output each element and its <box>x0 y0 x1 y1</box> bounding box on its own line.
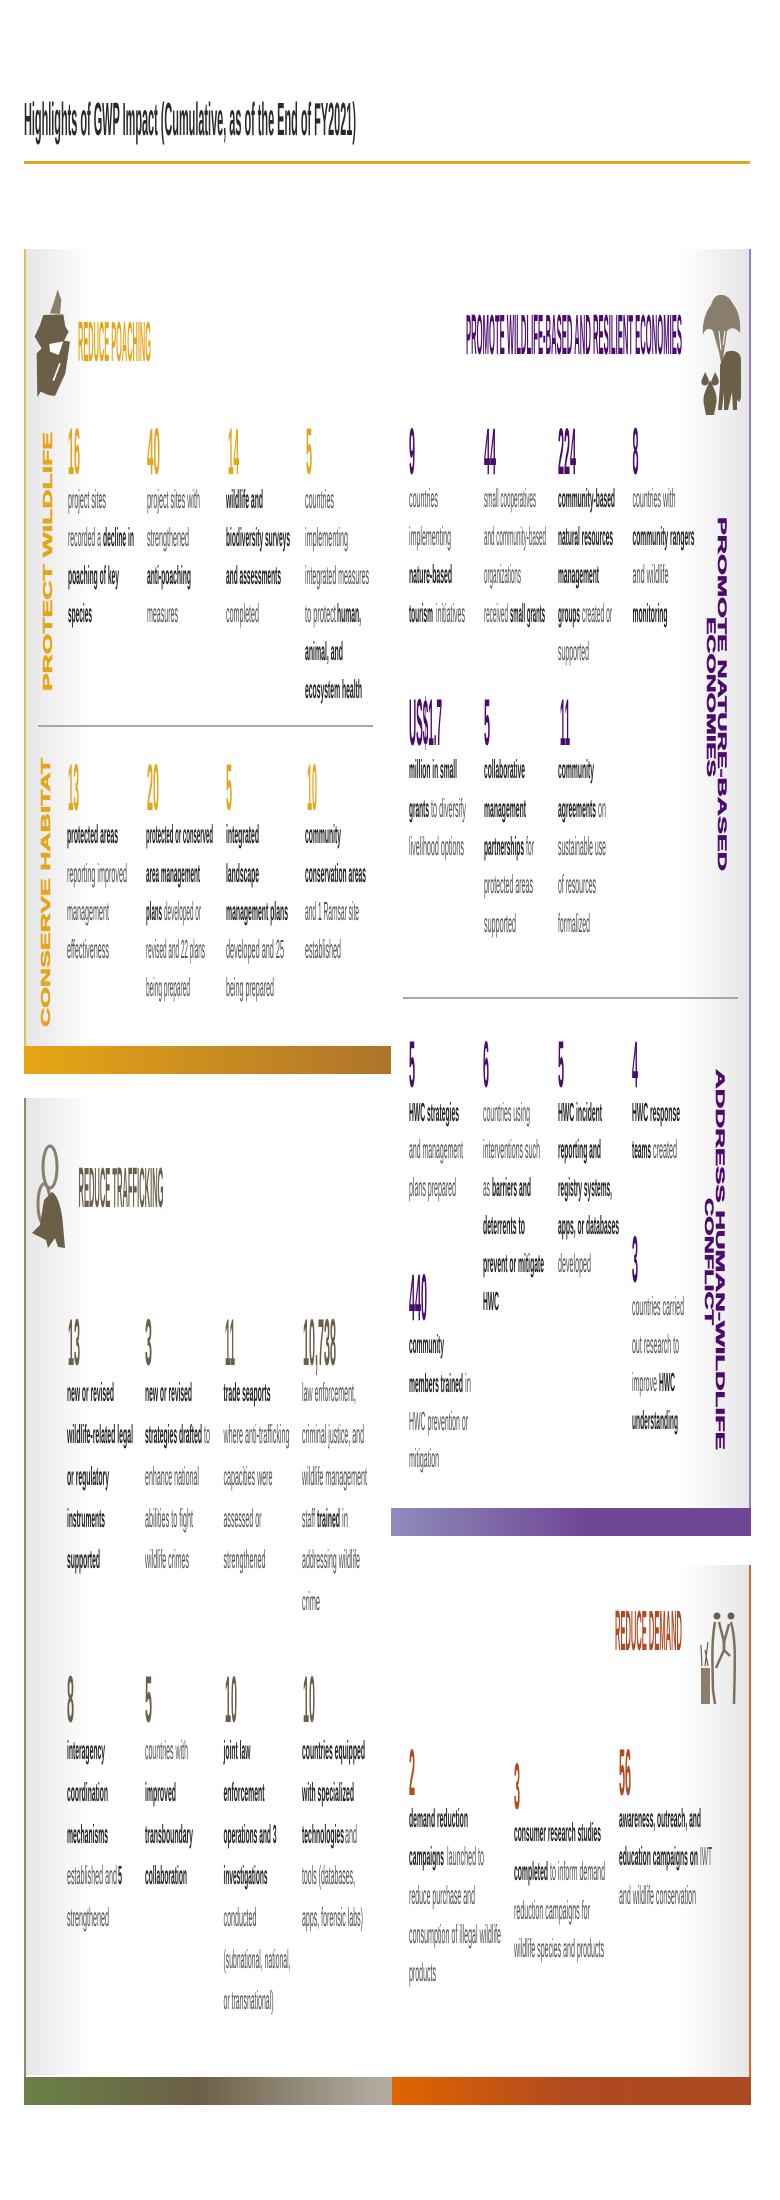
panel: promote wildlife-based economies: HWC incident <box>558 1097 602 1127</box>
stat: 5 landscape plans <box>226 750 288 1002</box>
panel: promote wildlife-based economies <box>403 249 751 1536</box>
stat: 6 countries barriers: 6 <box>483 1027 489 1101</box>
text: and 1 Ramsar site <box>305 896 359 926</box>
panel: promote wildlife-based economies: natural resources <box>558 521 613 551</box>
panel: reduce demand: to inform demand <box>550 1856 605 1886</box>
stat: 9 countries nature-based tourism <box>409 414 465 628</box>
panel: reduce demand: IWT <box>700 1841 712 1871</box>
stat: 10,738 staff trained: staff <box>302 1503 315 1533</box>
stat: 44 small grants <box>484 414 546 628</box>
panel: promote wildlife-based economies: livelihood options <box>409 831 464 861</box>
panel: reduce poaching: protected areas <box>67 819 118 849</box>
panel: reduce poaching: integrated <box>226 819 259 849</box>
stat: 440 community members <box>409 1260 471 1473</box>
text: criminal justice, and <box>302 1419 364 1449</box>
stat: 3 countries research <box>632 1222 684 1435</box>
stat: 44 small grants: 44 <box>484 414 496 488</box>
panel: promote wildlife-based economies: and community-based <box>484 521 546 551</box>
label: promote nature-based economies: ECONOMIES <box>704 617 718 777</box>
stat: 440 community members: mitigation <box>409 1443 439 1473</box>
bar: economies footer <box>391 1508 751 1536</box>
stat: US$1.7 million <box>409 685 466 861</box>
stat: 4 response teams: teams <box>632 1134 651 1164</box>
panel: reduce trafficking <box>24 1098 392 2105</box>
stat: 16 project sites: 16 <box>68 414 80 488</box>
panel: promote wildlife-based economies: community <box>409 1329 444 1359</box>
panel: promote wildlife-based economies: to diversify <box>431 793 466 823</box>
stat: 3 consumer research studies: completed <box>514 1856 548 1886</box>
stat: 44 small grants: received <box>484 598 508 628</box>
panel: reduce poaching: implementing <box>305 522 348 552</box>
panel: reduce trafficking: enhance national <box>145 1461 199 1491</box>
panel: reduce trafficking: instruments <box>67 1503 105 1533</box>
panel: promote wildlife-based economies: interventions such <box>483 1134 540 1164</box>
panel: promote wildlife-based economies: nature-based <box>409 559 452 589</box>
text: integrated measures <box>305 560 369 590</box>
stat: 2 demand reduction campaigns <box>409 1735 501 1987</box>
stat: 224 resource groups: 224 <box>558 414 576 488</box>
stat: 10 joint operations: conducted <box>224 1902 256 1932</box>
panel: promote wildlife-based economies: deterrents to <box>483 1210 525 1240</box>
panel: reduce poaching: measures <box>147 598 178 628</box>
panel: reduce trafficking: interagency <box>67 1735 105 1765</box>
label: protect wildlife: PROTECT WILDLIFE <box>40 431 55 691</box>
text: REDUCE TRAFFICKING <box>78 1156 164 1220</box>
stat: 8 coordination mechanisms: 8 <box>67 1662 74 1736</box>
panel: promote wildlife-based economies: barriers and <box>492 1172 531 1202</box>
stat: 5 countries integrated measures: countries <box>305 484 334 514</box>
icon: people and wildlife product <box>701 1612 735 1704</box>
panel: reduce poaching: developed and 25 <box>226 934 284 964</box>
stat: 20 management plans <box>146 750 213 1002</box>
label: address human-wildlife conflict <box>702 1069 727 1450</box>
panel: reduce trafficking: where anti-trafficking <box>223 1419 290 1449</box>
panel: reduce trafficking: improved <box>145 1777 176 1807</box>
panel: promote wildlife-based economies: partnerships <box>484 831 524 861</box>
panel: promote wildlife-based economies: registry systems, <box>558 1172 612 1202</box>
stat: 5 countries integrated measures <box>305 414 369 704</box>
stat: 10,738 staff trained: crime <box>302 1586 320 1616</box>
text: 10,738 <box>303 1305 336 1379</box>
panel: reduce trafficking: strategies drafted <box>145 1419 202 1449</box>
stat: 16 project sites: species <box>68 598 92 628</box>
stat: 5 HWC incident reporting: developed <box>558 1248 591 1278</box>
panel: reduce trafficking: (subnational, national, <box>224 1944 290 1974</box>
panel: reduce poaching: area management <box>146 858 200 888</box>
stat: 5 transboundary: 5 <box>145 1662 152 1736</box>
panel: reduce trafficking: technologies <box>302 1819 344 1849</box>
stat: 14 surveys <box>226 414 290 628</box>
panel: reduce poaching: human, <box>337 598 361 628</box>
panel: reduce trafficking: wildlife crimes <box>145 1544 189 1574</box>
stat: 5 HWC strategies <box>409 1027 463 1202</box>
panel: reduce trafficking: strengthened <box>224 1544 266 1574</box>
panel: promote wildlife-based economies: monitoring <box>632 598 668 628</box>
panel: promote wildlife-based economies: HWC strategies <box>409 1097 459 1127</box>
label: promote nature-based economies: PROMOTE NATURE-BASED <box>715 517 729 872</box>
panel: reduce trafficking: capacities were <box>224 1461 272 1491</box>
panel: reduce poaching: animal, and <box>305 636 343 666</box>
panel: promote wildlife-based economies: organizations <box>484 559 521 589</box>
stat: 8 community rangers <box>632 414 694 628</box>
panel: reduce poaching: management plans <box>226 896 288 926</box>
panel: reduce poaching: project sites with <box>147 484 200 514</box>
text: tools (databases, <box>302 1860 355 1890</box>
panel: reduce poaching: wildlife and <box>226 484 263 514</box>
panel: reduce poaching: effectiveness <box>67 934 109 964</box>
stat: 10,738 staff trained: trained <box>317 1503 340 1533</box>
panel: promote wildlife-based economies: US$1.7 <box>409 685 442 759</box>
panel: reduce trafficking: abilities to fight <box>145 1503 193 1533</box>
text: countries equipped <box>302 1735 365 1765</box>
text: with specialized <box>302 1777 354 1807</box>
stat: 10 joint operations: joint law <box>223 1735 251 1765</box>
icon: handcuffs and animal <box>32 1146 65 1248</box>
panel: reduce trafficking: investigations <box>224 1860 268 1890</box>
stat: 14 surveys: completed <box>226 598 259 628</box>
stat: 40 project sites: 40 <box>147 414 160 488</box>
stat: 9 countries nature-based tourism: tourism <box>409 598 433 628</box>
stat: US$1.7 million: grants <box>409 793 429 823</box>
panel: promote wildlife-based economies: sustainable use <box>558 831 606 861</box>
panel: promote wildlife-based economies: protected areas <box>484 869 533 899</box>
panel: reduce demand <box>409 1565 751 2105</box>
panel: reduce poaching <box>24 249 391 1074</box>
panel: reduce poaching: anti-poaching <box>147 560 191 590</box>
stat: 5 countries integrated measures: to protect <box>305 598 336 628</box>
stat: 5 countries integrated measures: 5 <box>306 414 312 488</box>
panel: promote wildlife-based economies: members trained <box>409 1368 463 1398</box>
panel: reduce trafficking: or regulatory <box>67 1461 109 1491</box>
panel: reduce poaching: landscape <box>226 858 259 888</box>
stat: 13 legal instruments <box>67 1305 133 1574</box>
label: address human-wildlife conflict: ADDRESS HUMAN-WILDLIFE <box>713 1069 727 1450</box>
stat: 4 response teams <box>632 1027 680 1164</box>
panel: promote wildlife-based economies: in <box>465 1368 471 1398</box>
stat: 20 management plans: plans <box>146 896 162 926</box>
stat: 16 project sites <box>68 414 134 628</box>
stat: 4 response teams: 4 <box>632 1027 638 1101</box>
panel: reduce trafficking: collaboration <box>145 1860 187 1890</box>
stat: 3 countries research: 3 <box>632 1222 638 1296</box>
panel: promote wildlife-based economies: management <box>484 793 526 823</box>
panel: promote wildlife-based economies: agreements <box>558 793 596 823</box>
panel: promote wildlife-based economies: small grants <box>510 598 545 628</box>
panel: promote wildlife-based economies: created or <box>582 598 612 628</box>
stat: 10,738 staff trained: in <box>342 1503 348 1533</box>
stat: 6 countries barriers: as <box>483 1172 490 1202</box>
stat: 14 surveys: 14 <box>228 414 239 488</box>
panel: reduce trafficking: established and <box>67 1860 117 1890</box>
stat: 224 resource groups: groups <box>558 598 580 628</box>
stat: 5 HWC strategies: 5 <box>409 1027 415 1101</box>
stat: 13 protected areas: 13 <box>68 750 79 824</box>
panel: promote wildlife-based economies: million in small <box>409 754 457 784</box>
panel: promote wildlife-based economies: implementing <box>409 521 451 551</box>
panel: promote wildlife-based economies: reporting and <box>558 1134 601 1164</box>
panel: reduce trafficking: or transnational) <box>224 1985 274 2015</box>
icon: tree and elephant <box>701 295 741 415</box>
panel: reduce poaching: community <box>305 819 341 849</box>
stat: 11 community agreements <box>558 685 606 938</box>
bar: poaching footer <box>24 1046 391 1074</box>
panel: reduce trafficking: trade seaports <box>224 1377 270 1407</box>
panel: promote wildlife-based economies: supported <box>484 908 516 938</box>
panel: promote wildlife-based economies: countries using <box>483 1097 530 1127</box>
stat: 13 protected areas <box>67 750 127 964</box>
panel: reduce trafficking: enforcement <box>224 1777 265 1807</box>
panel: promote wildlife-based economies: collaborative <box>484 754 525 784</box>
panel: reduce poaching: revised and 22 plans <box>146 934 205 964</box>
panel: promote wildlife-based economies: of resources <box>558 869 596 899</box>
text: apps, forensic labs) <box>302 1902 363 1932</box>
panel: reduce trafficking: new or revised <box>145 1377 192 1407</box>
stat: 10 joint operations: 10 <box>225 1662 237 1736</box>
panel: reduce trafficking: wildlife-related legal <box>67 1419 133 1449</box>
label: conserve habitat: CONSERVE HABITAT <box>38 758 53 1027</box>
stat: 224 resource groups <box>558 414 615 666</box>
panel: reduce poaching: management <box>67 896 109 926</box>
icon: rhino and hand <box>35 289 70 397</box>
panel: promote wildlife-based economies: and management <box>409 1134 463 1164</box>
panel: reduce poaching: developed or <box>164 896 201 926</box>
stat: 56 awareness campaigns: 56 <box>619 1735 631 1809</box>
panel: reduce trafficking: countries with <box>145 1735 188 1765</box>
stat: 9 countries nature-based tourism: countries <box>409 483 438 513</box>
stat: 16 project sites: recorded a <box>68 522 101 552</box>
stat: 10,738 staff trained <box>302 1305 367 1616</box>
panel: reduce poaching: reporting improved <box>67 858 127 888</box>
panel: reduce poaching: established <box>305 934 341 964</box>
panel: promote wildlife-based economies: small cooperatives <box>484 483 536 513</box>
stat: 11 trade seaports <box>223 1305 290 1574</box>
panel: reduce trafficking: transboundary <box>145 1819 193 1849</box>
text: ecosystem health <box>305 674 362 704</box>
panel: reduce poaching: decline in <box>103 522 134 552</box>
panel: reduce trafficking: strengthened <box>67 1902 109 1932</box>
stat: 3 consumer research studies <box>514 1749 605 1963</box>
panel: promote wildlife-based economies: formalized <box>558 908 590 938</box>
panel: promote wildlife-based economies: management <box>558 559 599 589</box>
stat: 2 demand reduction campaigns: products <box>409 1957 436 1987</box>
stat: 5 partnerships: 5 <box>484 685 490 759</box>
panel: promote wildlife-based economies: and wildlife <box>632 559 668 589</box>
panel: reduce trafficking: to <box>204 1419 210 1449</box>
stat: 3 strategies <box>145 1305 210 1574</box>
stat: 5 partnerships <box>484 685 534 938</box>
stat: 11 trade seaports: 11 <box>225 1305 235 1379</box>
panel: promote wildlife-based economies: initiatives <box>436 598 465 628</box>
stat: 13 legal instruments: supported <box>67 1544 100 1574</box>
stat: 2 demand reduction campaigns: 2 <box>409 1735 415 1809</box>
stat: 5 HWC incident reporting: 5 <box>558 1027 564 1101</box>
panel: reduce poaching: biodiversity surveys <box>226 522 290 552</box>
stat: 56 awareness campaigns <box>619 1735 712 1910</box>
panel: reduce poaching: being prepared <box>146 972 190 1002</box>
panel: promote wildlife-based economies: plans prepared <box>409 1172 456 1202</box>
stat: 13 legal instruments: 13 <box>68 1305 80 1379</box>
stat: 11 community agreements: 11 <box>560 685 570 759</box>
panel: promote wildlife-based economies: HWC <box>659 1367 675 1397</box>
stat: 2 demand reduction campaigns: campaigns <box>409 1841 444 1871</box>
stat: 8 coordination mechanisms <box>67 1662 122 1932</box>
panel: reduce poaching: poaching of key <box>68 560 119 590</box>
panel: reduce trafficking: assessed or <box>224 1503 262 1533</box>
panel: promote wildlife-based economies: community-based <box>558 483 615 513</box>
stat: 5 transboundary <box>145 1662 193 1890</box>
stat: 40 project sites <box>147 414 200 628</box>
panel: reduce demand: reduce purchase and <box>409 1880 475 1910</box>
panel: reduce poaching: REDUCE POACHING <box>78 310 151 374</box>
text: addressing wildlife <box>302 1544 360 1574</box>
panel: promote wildlife-based economies: HWC prevention or <box>409 1406 468 1436</box>
stat: 440 community members: 440 <box>409 1260 427 1334</box>
stat: 9 countries nature-based tourism: 9 <box>409 414 415 488</box>
panel: reduce trafficking: operations and 3 <box>224 1819 276 1849</box>
stat: 10 community conservation areas <box>305 750 366 964</box>
panel: reduce trafficking: and <box>345 1819 357 1849</box>
panel: promote wildlife-based economies: community <box>558 754 594 784</box>
panel: reduce poaching: protected or conserved <box>146 819 213 849</box>
stat: 3 consumer research studies: 3 <box>514 1749 520 1823</box>
panel: reduce poaching: being prepared <box>226 972 274 1002</box>
panel: promote wildlife-based economies: for <box>526 831 534 861</box>
panel: reduce demand: demand reduction <box>409 1803 468 1833</box>
text: law enforcement, <box>302 1377 356 1407</box>
stat: 8 community rangers: 8 <box>632 414 638 488</box>
stat: 5 landscape plans: 5 <box>226 750 232 824</box>
panel: reduce poaching: strengthened <box>147 522 189 552</box>
stat: 6 countries barriers <box>483 1027 544 1316</box>
panel: reduce trafficking: mechanisms <box>67 1819 108 1849</box>
panel: promote wildlife-based economies: created <box>653 1134 677 1164</box>
stat: 10 community conservation areas: 10 <box>307 750 317 824</box>
stat: 10 joint operations <box>223 1662 290 2015</box>
bar: trafficking footer <box>24 2077 392 2105</box>
text: conservation areas <box>305 858 366 888</box>
stat: 3 countries research: improve <box>632 1367 657 1397</box>
panel: promote wildlife-based economies: prevent or mitigate <box>483 1248 544 1278</box>
panel: reduce poaching: project sites <box>68 484 106 514</box>
stat: 20 management plans: 20 <box>147 750 159 824</box>
stat: 10 countries technologies: 10 <box>303 1662 315 1736</box>
stat: 3 strategies: 3 <box>145 1305 152 1379</box>
panel: reduce trafficking: coordination <box>67 1777 108 1807</box>
label: promote nature-based economies <box>704 517 729 872</box>
stat: 6 countries barriers: HWC <box>483 1286 499 1316</box>
panel: reduce demand: consumption of illegal wildlife <box>409 1919 501 1949</box>
label: address human-wildlife conflict: CONFLICT <box>702 1198 716 1326</box>
panel: promote wildlife-based economies: on <box>598 793 606 823</box>
panel: reduce trafficking: 5 <box>118 1860 122 1890</box>
stat: 5 HWC incident reporting <box>558 1027 619 1278</box>
panel: promote wildlife-based economies: supported <box>558 636 589 666</box>
text: wildlife management <box>302 1461 367 1491</box>
panel: reduce trafficking: new or revised <box>67 1377 114 1407</box>
bar: demand footer <box>392 2077 751 2105</box>
panel: reduce demand: launched to <box>447 1841 484 1871</box>
stat: 10 countries technologies <box>302 1662 365 1932</box>
panel: reduce poaching: and assessments <box>226 560 281 590</box>
